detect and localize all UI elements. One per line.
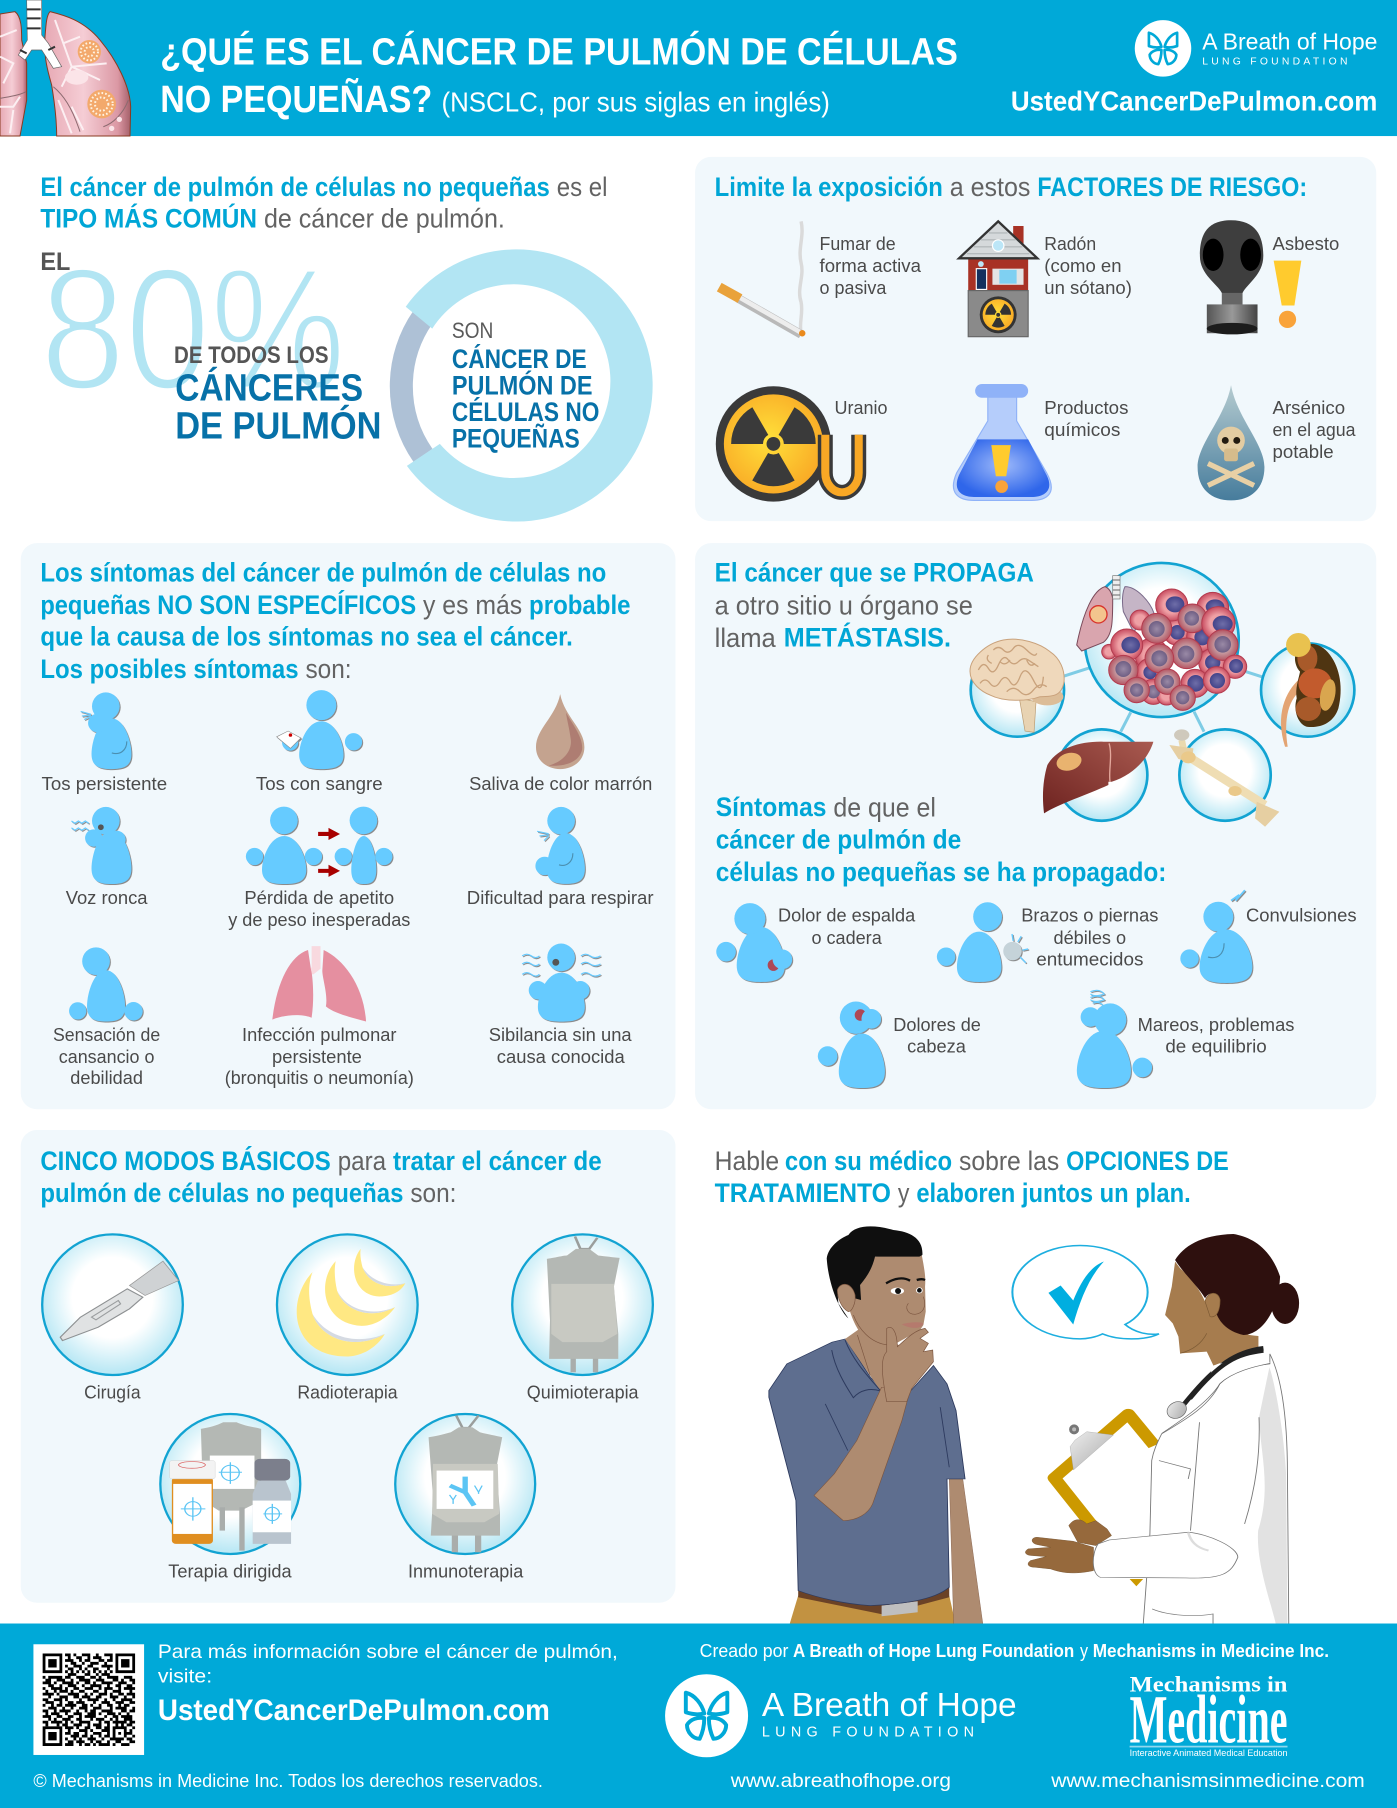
logo: Mechanisms in Medicine: Interactive Animated Medical Education — [1130, 1748, 1287, 1758]
icon: house with radon — [959, 221, 1037, 337]
title — [160, 30, 958, 121]
label: radiotherapy: Radioterapia — [297, 1382, 398, 1403]
icon: coughing blood — [277, 690, 362, 769]
icon: radiotherapy — [277, 1234, 418, 1375]
label: back pain: o cadera — [811, 927, 882, 948]
icon: brain — [970, 639, 1064, 732]
panel: 80 percent statistic — [40, 172, 653, 522]
heading: metastasis symptoms: cáncer de pulmón de — [716, 825, 961, 855]
text: created by: A Breath of Hope Lung Foundation — [793, 1640, 1074, 1661]
text: more information: Para más información sobre el cáncer de pulmón, — [158, 1641, 618, 1663]
heading: metastasis: METÁSTASIS. — [784, 622, 951, 652]
icon: cigarette — [719, 221, 805, 336]
title: NO PEQUEÑAS? — [160, 77, 432, 121]
logo: A Breath of Hope footer: LUNG FOUNDATION — [762, 1725, 974, 1741]
heading: metastasis: a otro sitio u órgano se — [715, 591, 973, 621]
text: created by: Creado por — [700, 1640, 788, 1661]
panel: symptoms — [21, 543, 675, 1109]
icon: seizures — [1180, 890, 1252, 983]
logo: Mechanisms in Medicine — [1130, 1672, 1287, 1758]
label: weak limbs: débiles o — [1054, 927, 1126, 948]
label: lung infection: persistente — [272, 1046, 362, 1067]
label: chemicals: químicos — [1044, 419, 1120, 440]
heading: metastasis — [715, 558, 1034, 653]
heading: most common type: El cáncer de pulmón de células no pequeñas — [40, 172, 550, 202]
heading: metastasis symptoms: Síntomas — [716, 792, 826, 822]
qr code — [33, 1644, 144, 1755]
label: radon: un sótano) — [1044, 277, 1132, 298]
label: brown saliva: Saliva de color marrón — [469, 773, 652, 794]
icon: lungs with tumors — [0, 0, 131, 136]
text: mechanisms website: www.mechanismsinmedicine.com — [1050, 1770, 1365, 1792]
icon: uranium radiation symbol — [716, 386, 859, 502]
text: more information: UstedYCancerDePulmon.com — [158, 1694, 550, 1727]
footer — [0, 1624, 1397, 1808]
label: radon: (como en — [1044, 255, 1122, 276]
label: smoking: Fumar de — [820, 233, 896, 254]
label: smoking: o pasiva — [820, 277, 887, 298]
heading: metastasis symptoms: células no pequeñas se ha propagado: — [716, 857, 1166, 887]
illustration: patient — [769, 1226, 983, 1626]
label: weak limbs: entumecidos — [1036, 949, 1143, 970]
label: tiredness: cansancio o — [59, 1046, 154, 1067]
text: created by: y — [1080, 1640, 1089, 1661]
heading: metastasis: El cáncer que se PROPAGA — [715, 558, 1034, 588]
text: foundation website: www.abreathofhope.org — [730, 1770, 951, 1792]
donut label: SON — [452, 318, 493, 343]
label: of all lung cancers: CÁNCERES — [175, 366, 363, 410]
icon: persistent cough — [81, 692, 131, 769]
heading: symptoms: que la causa de los síntomas no sea el cáncer. — [40, 622, 573, 652]
icon: back pain — [716, 903, 792, 982]
heading: talk to your doctor: OPCIONES DE — [1066, 1146, 1229, 1176]
label: wheezing: causa conocida — [497, 1046, 625, 1067]
panel: treatments — [21, 1130, 675, 1603]
donut chart — [401, 249, 653, 522]
label: lung infection — [225, 1024, 414, 1088]
label: radon: Radón — [1044, 233, 1096, 254]
icon: weight loss — [246, 807, 392, 884]
label: uranium: Uranio — [835, 397, 888, 418]
donut label: PEQUEÑAS — [452, 423, 580, 453]
heading: risk factors — [715, 172, 1307, 202]
logo: A Breath of Hope: LUNG FOUNDATION — [1202, 57, 1347, 68]
logo: A Breath of Hope footer — [665, 1674, 1017, 1757]
heading: symptoms: Los posibles síntomas — [40, 654, 299, 684]
label: of all lung cancers: DE PULMÓN — [175, 404, 382, 448]
donut label: CÉLULAS NO — [452, 397, 599, 427]
heading: risk factors: FACTORES DE RIESGO: — [1037, 172, 1307, 202]
icon: poisoned water drop — [1198, 385, 1264, 500]
icon: brown saliva drop — [536, 694, 584, 769]
label: weak limbs: Brazos o piernas — [1021, 904, 1158, 925]
label: difficulty breathing: Dificultad para respirar — [467, 887, 654, 908]
illustration: speech bubble with check — [1012, 1245, 1159, 1339]
heading: risk factors: Limite la exposición — [715, 172, 943, 202]
heading: most common type: es el — [557, 172, 607, 202]
label: persistent cough: Tos persistente — [41, 773, 167, 794]
icon: weak limbs — [937, 902, 1028, 982]
icon: gas mask — [1200, 220, 1263, 334]
label: chemicals: Productos — [1044, 397, 1128, 418]
label: radon — [1044, 233, 1132, 298]
panel: metastasis — [695, 543, 1376, 1109]
section: talk to your doctor — [715, 1146, 1299, 1626]
donut label: PULMÓN DE — [452, 370, 592, 400]
logo: Mechanisms in Medicine: Medicine — [1130, 1680, 1287, 1757]
heading: talk to your doctor: con su médico — [785, 1146, 952, 1176]
label: headache: cabeza — [907, 1036, 967, 1057]
diagram: organs metastasis — [970, 563, 1354, 827]
text: more information: visite: — [158, 1665, 212, 1687]
label: dizziness: de equilibrio — [1165, 1036, 1267, 1057]
label: lung infection: (bronquitis o neumonía) — [225, 1067, 414, 1088]
icon: wheezing — [522, 944, 601, 1022]
heading: symptoms: probable — [529, 590, 630, 620]
label: asbestos: Asbesto — [1273, 233, 1339, 254]
heading: treatments: para — [338, 1146, 386, 1176]
heading: symptoms — [40, 558, 630, 684]
label: tiredness: Sensación de — [53, 1024, 160, 1045]
label: arsenic: Arsénico — [1273, 397, 1345, 418]
label: wheezing — [489, 1024, 632, 1067]
heading: talk to your doctor: y — [898, 1178, 910, 1208]
text: copyright: © Mechanisms in Medicine Inc. Todos los derechos reservados. — [33, 1770, 543, 1791]
label: coughing blood: Tos con sangre — [256, 773, 383, 794]
header banner — [0, 0, 1397, 136]
icon: kidney — [1281, 633, 1341, 747]
label: headache — [893, 1014, 981, 1057]
icon: chemical flask — [953, 384, 1051, 500]
logo: A Breath of Hope — [1135, 20, 1377, 77]
heading: most common type — [40, 172, 607, 234]
icon: lung infection — [272, 946, 366, 1021]
label: of all lung cancers — [174, 342, 382, 448]
label: dizziness — [1138, 1014, 1294, 1057]
label: tiredness — [53, 1024, 160, 1088]
icon: dizziness — [1077, 990, 1152, 1088]
label: headache: Dolores de — [893, 1014, 981, 1035]
heading: talk to your doctor: elaboren juntos un plan. — [916, 1178, 1191, 1208]
heading: talk to your doctor — [715, 1146, 1229, 1208]
illustration: doctor — [1025, 1234, 1299, 1626]
title: ¿QUÉ ES EL CÁNCER DE PULMÓN DE CÉLULAS — [160, 30, 958, 74]
text: more information — [158, 1641, 618, 1727]
heading: treatments: tratar el cáncer de — [393, 1146, 602, 1176]
heading: symptoms: Los síntomas del cáncer de pulmón de células no — [40, 558, 606, 588]
icon: tiredness — [69, 947, 143, 1021]
heading: treatments — [40, 1146, 602, 1208]
logo: A Breath of Hope: A Breath of Hope — [1202, 29, 1377, 55]
label: appetite and weight loss: y de peso inesperadas — [228, 909, 410, 930]
heading: treatments: son: — [410, 1178, 456, 1208]
heading: symptoms: y es más — [423, 590, 522, 620]
label: appetite and weight loss — [228, 887, 410, 930]
heading: talk to your doctor: TRATAMIENTO — [715, 1178, 891, 1208]
icon: targeted therapy — [160, 1414, 300, 1554]
label: tiredness: debilidad — [70, 1067, 143, 1088]
big number 80%: 80% — [40, 232, 346, 426]
label: chemicals — [1044, 397, 1128, 440]
heading: most common type: TIPO MÁS COMÚN — [40, 204, 257, 234]
icon: difficulty breathing — [535, 807, 585, 884]
heading: risk factors: a estos — [950, 172, 1030, 202]
icon: liver — [1043, 742, 1153, 813]
heading: talk to your doctor: sobre las — [959, 1146, 1059, 1176]
heading: symptoms: pequeñas NO SON ESPECÍFICOS — [40, 590, 416, 620]
heading: metastasis symptoms: de que el — [833, 792, 936, 822]
label: hoarse voice: Voz ronca — [66, 887, 148, 908]
label: smoking — [820, 233, 922, 298]
icon: headache — [818, 1002, 885, 1088]
heading: symptoms: son: — [305, 654, 352, 684]
label: EL: EL — [40, 248, 70, 276]
icon: immunotherapy bag — [395, 1414, 535, 1554]
label: back pain: Dolor de espalda — [778, 904, 916, 925]
heading: most common type: de cáncer de pulmón. — [264, 204, 505, 234]
heading: treatments: CINCO MODOS BÁSICOS — [40, 1146, 331, 1176]
label: of all lung cancers: DE TODOS LOS — [174, 342, 329, 369]
label: chemotherapy: Quimioterapia — [527, 1382, 639, 1403]
label: targeted therapy: Terapia dirigida — [168, 1560, 292, 1581]
label: smoking: forma activa — [820, 255, 922, 276]
icon: chemotherapy bag — [512, 1234, 653, 1375]
panel: risk factors — [695, 157, 1376, 521]
logo: A Breath of Hope footer: A Breath of Hope — [762, 1687, 1017, 1724]
icon: hoarse voice — [71, 807, 131, 884]
icon: surgery scalpel — [42, 1234, 183, 1375]
icon: small lungs — [1077, 576, 1154, 651]
label: dizziness: Mareos, problemas — [1138, 1014, 1294, 1035]
label: surgery: Cirugía — [84, 1382, 141, 1403]
heading: treatments: pulmón de células no pequeñas — [40, 1178, 403, 1208]
icon: warning exclamation — [1274, 261, 1301, 328]
donut label: CÁNCER DE — [452, 344, 587, 374]
donut label — [452, 318, 599, 453]
text: created by: Mechanisms in Medicine Inc. — [1093, 1640, 1329, 1661]
text: created by — [700, 1640, 1329, 1661]
logo: Mechanisms in Medicine: Mechanisms in — [1130, 1672, 1287, 1697]
heading: metastasis: llama — [715, 623, 776, 653]
icon: cancer cells — [1102, 589, 1247, 710]
label: lung infection: Infección pulmonar — [242, 1024, 397, 1045]
website url: UstedYCancerDePulmon.com — [1011, 86, 1377, 117]
label: weak limbs — [1021, 904, 1158, 970]
icon: bone — [1169, 729, 1279, 827]
heading: talk to your doctor: Hable — [715, 1146, 779, 1176]
label: arsenic: en el agua — [1273, 419, 1356, 440]
label: appetite and weight loss: Pérdida de apetito — [244, 887, 394, 908]
heading: metastasis symptoms — [716, 792, 1166, 887]
label: back pain — [778, 904, 916, 948]
label: wheezing: Sibilancia sin una — [489, 1024, 632, 1045]
label: seizures: Convulsiones — [1246, 904, 1357, 925]
label: arsenic — [1273, 397, 1356, 462]
label: immunotherapy: Inmunoterapia — [408, 1560, 524, 1581]
label: arsenic: potable — [1273, 441, 1334, 462]
title: (NSCLC, por sus siglas en inglés) — [441, 86, 830, 117]
